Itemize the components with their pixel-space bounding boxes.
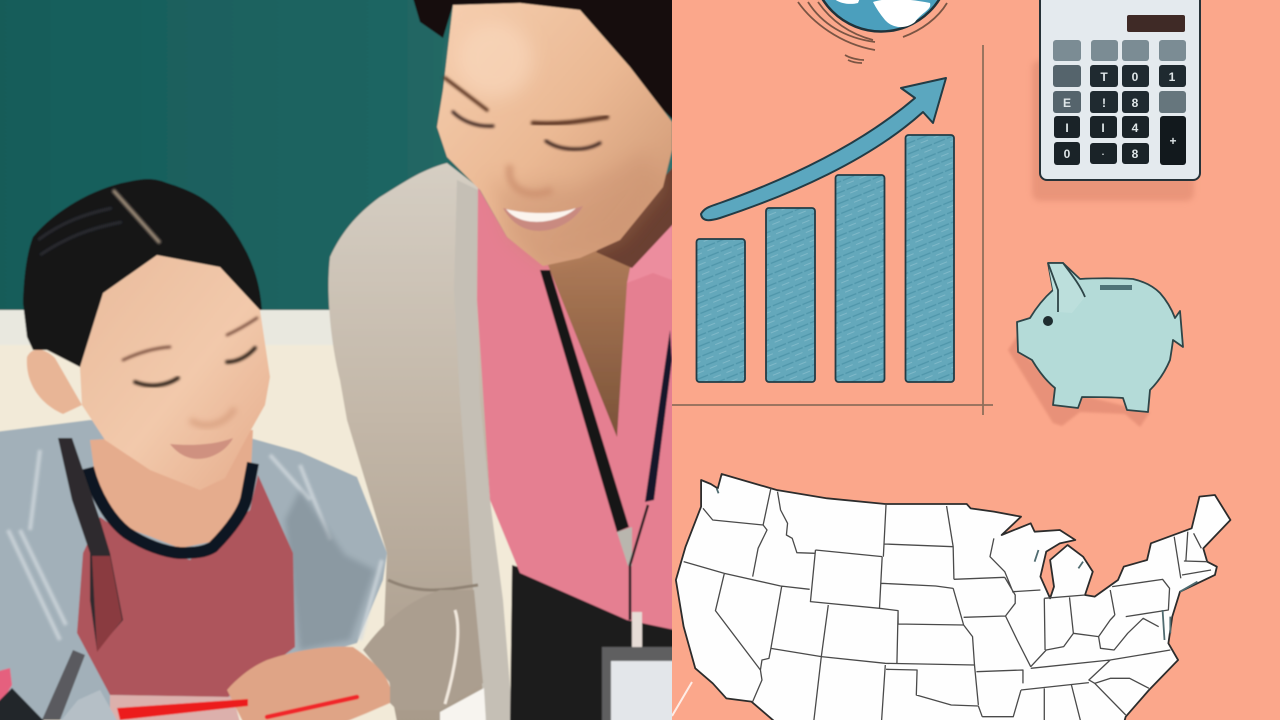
- cardigan stripes: [8, 450, 382, 640]
- calculator key glyphs: 8: [1132, 96, 1139, 110]
- lower left strap: [42, 650, 85, 720]
- teacher right eye: [546, 141, 600, 149]
- globe landmass: [873, 0, 930, 27]
- chesapeake and coast details: [717, 488, 1197, 640]
- piggy ear outline: [1048, 263, 1085, 312]
- girl shirt collar: [88, 463, 253, 553]
- id badge: [602, 647, 675, 720]
- cardigan sleeve fold: [388, 580, 478, 590]
- teacher right eyebrow: [533, 117, 607, 124]
- piggy shadow: [1008, 335, 1150, 427]
- calculator key glyphs: 0: [1132, 70, 1139, 84]
- face shadow: [496, 169, 666, 256]
- calculator key glyphs: 0: [1064, 147, 1071, 161]
- teacher forearm sleeve: [363, 590, 483, 710]
- chalk streak: [672, 682, 692, 716]
- girl ear: [27, 350, 82, 414]
- teacher blouse: [477, 187, 675, 630]
- teacher hair: [412, 0, 675, 122]
- calculator key glyphs: E: [1063, 96, 1071, 110]
- teacher teeth: [506, 208, 576, 222]
- state borders: [684, 488, 1211, 720]
- calculator display: [1127, 15, 1185, 32]
- icon: globe: [798, 0, 950, 63]
- lanyard: [540, 270, 629, 532]
- red pencil: [117, 697, 357, 720]
- calculator key glyphs: .: [1102, 147, 1104, 157]
- teacher figure: [328, 0, 675, 720]
- hair sheen: [38, 208, 122, 255]
- calculator key glyphs: 8: [1132, 147, 1139, 161]
- US map: [676, 474, 1230, 720]
- chart axes: [672, 45, 993, 415]
- girl mouth: [170, 438, 233, 459]
- pink object at lower left: [0, 668, 12, 705]
- map outline: [676, 474, 1230, 720]
- piggy eye: [1043, 316, 1053, 326]
- panel: classroom photo: [0, 0, 675, 720]
- face highlight: [457, 22, 533, 98]
- teacher left eyebrow: [445, 78, 487, 110]
- trim beaded red: [92, 556, 122, 652]
- chalk ledge: [0, 308, 333, 344]
- calculator key glyphs: [1063, 70, 1177, 161]
- piggy coin slot: [1100, 285, 1132, 290]
- icon: calculator: [1032, 0, 1200, 201]
- lanyard buckle: [632, 612, 642, 648]
- calculator key glyphs: !: [1102, 96, 1106, 110]
- girl left eyebrow: [123, 347, 170, 360]
- globe small landmass: [833, 0, 860, 4]
- piggy body: [1017, 263, 1183, 412]
- lanyard thin cord: [630, 505, 648, 620]
- girl red shirt: [77, 475, 295, 697]
- globe sphere: [812, 0, 950, 32]
- teacher nose shadow: [509, 165, 552, 194]
- teacher dark skirt: [510, 565, 675, 720]
- girl left eye: [135, 378, 178, 385]
- teacher left eye: [453, 112, 493, 126]
- bar 2: [766, 208, 815, 382]
- teacher neck: [548, 250, 631, 437]
- teacher face: [437, 3, 672, 266]
- pale sleeve highlight: [445, 610, 458, 704]
- calculator shadow: [1032, 60, 1194, 201]
- dark object at lower left: [0, 688, 45, 720]
- calculator key glyphs: I: [1065, 121, 1069, 135]
- cardigan shading: [285, 490, 375, 650]
- bar 1: [696, 239, 745, 382]
- girl right eyebrow: [227, 318, 257, 335]
- notebook: [110, 695, 240, 720]
- salmon background: [672, 0, 1280, 720]
- girl face: [80, 255, 270, 490]
- lanyard right strap: [645, 330, 672, 502]
- arrow: upward trend: [701, 78, 946, 220]
- piggy ear: [1048, 263, 1085, 313]
- bar chart: [672, 45, 993, 415]
- lower sleeve: [60, 690, 118, 720]
- calculator body: [1040, 0, 1200, 180]
- girl hand: [227, 647, 390, 720]
- girl neck: [90, 430, 253, 548]
- globe motion lines: [798, 2, 947, 63]
- teacher collar: [627, 222, 672, 283]
- girl hair: [23, 179, 262, 367]
- calculator keys: [1053, 40, 1186, 165]
- cardigan placket: [454, 180, 513, 720]
- classroom wall: [0, 344, 518, 720]
- icon: piggy bank: [1008, 263, 1183, 427]
- cardigan dark trim: [58, 438, 123, 650]
- calculator key glyphs: I: [1101, 121, 1105, 135]
- white object under sleeve: [440, 688, 486, 720]
- girl right eye: [227, 348, 255, 362]
- girl figure: [0, 179, 390, 720]
- chalkboard: [0, 0, 675, 312]
- girl nose shadow: [190, 408, 235, 425]
- teacher lips: [503, 206, 583, 231]
- teacher cardigan: [327, 162, 490, 720]
- lanyard clip: [617, 527, 632, 566]
- girl cardigan: [0, 420, 387, 720]
- calculator key glyphs: +: [1169, 134, 1177, 148]
- panel: finance graphics: [672, 0, 1280, 720]
- calculator key glyphs: 4: [1132, 121, 1139, 135]
- bar 4: [906, 135, 954, 382]
- calculator key glyphs: T: [1100, 70, 1108, 84]
- neck shadow: [596, 165, 675, 268]
- hair part: [113, 190, 160, 243]
- calculator key glyphs: 1: [1169, 70, 1176, 84]
- bar 3: [836, 175, 884, 382]
